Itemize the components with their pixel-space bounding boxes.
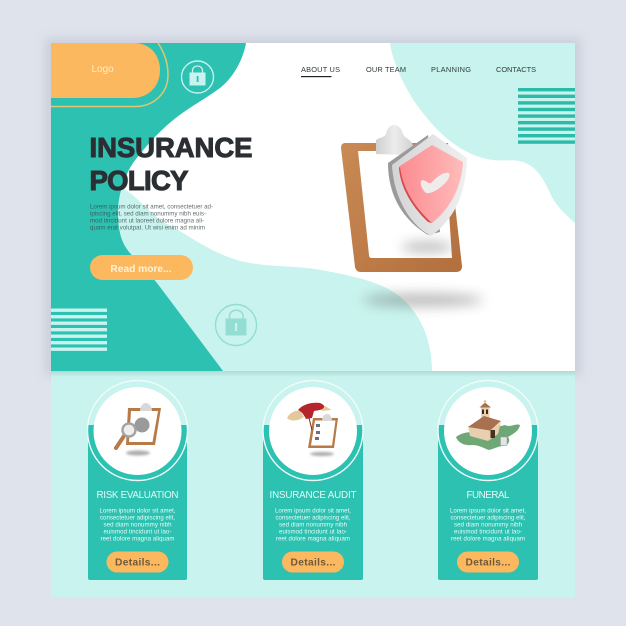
card text: consectetuer adipiscing elit, (450, 514, 526, 522)
card text: Lorem ipsum dolor sit amet, (275, 508, 351, 514)
shield pink (400, 145, 463, 223)
shadow: under clipboard (363, 294, 483, 306)
card text: sed diam nonummy nibh (454, 522, 522, 528)
clipboard clip (376, 125, 413, 155)
card: insurance audit (263, 380, 363, 580)
logo pill (51, 43, 160, 98)
card heading: FUNERAL (466, 490, 510, 501)
card text (450, 508, 526, 542)
button: read more (90, 255, 193, 280)
icon: church (456, 400, 520, 450)
body text: Lorem ipsum dolor sit amet, consectetuer ad- (90, 204, 213, 210)
body text: mod tincidunt ut laoreet dolore magna ali- (90, 218, 204, 224)
card text: euismod tincidunt ut lao- (454, 528, 522, 536)
nav: menu: OUR TEAM (366, 65, 406, 74)
card text: reet dolore magna aliquam (276, 536, 350, 542)
stripes: top right (518, 88, 575, 144)
logo outline (51, 43, 168, 106)
card text (100, 508, 176, 542)
button: details: Details... (290, 558, 336, 568)
stripes: bottom left (51, 308, 107, 351)
card text: Lorem ipsum dolor sit amet, (450, 508, 526, 514)
card text: consectetuer adipiscing elit, (276, 514, 351, 522)
shape: light bottom blob (115, 185, 432, 371)
card heading: INSURANCE AUDIT (270, 490, 357, 501)
body text: ipiscing elit, sed diam nonummy nibh euis- (90, 210, 206, 218)
nav: menu: PLANNING (431, 65, 471, 74)
panel: services (51, 371, 575, 597)
nav: menu: ABOUT US (301, 65, 340, 74)
button: details (457, 552, 519, 572)
shield back (388, 135, 440, 235)
icon: clipboard and umbrella (287, 403, 338, 456)
card text: reet dolore magna aliquam (451, 536, 525, 542)
title (90, 137, 252, 191)
illustration: clipboard with shield (341, 125, 467, 272)
clipboard board (341, 143, 462, 272)
icon: top lock (182, 61, 214, 93)
logo text: Logo (92, 64, 114, 75)
card text: reet dolore magna aliquam (100, 536, 174, 542)
card: funeral (438, 380, 538, 580)
card text: euismod tincidunt ut lao- (279, 528, 347, 536)
button: details (106, 552, 168, 572)
shield silver (392, 134, 467, 236)
card text: consectetuer adipiscing elit, (100, 514, 175, 522)
icon: bottom lock (216, 304, 256, 346)
card text: sed diam nonummy nibh (104, 522, 172, 528)
title: INSURANCE (90, 132, 252, 163)
button: details (282, 552, 344, 572)
shadow: under shield (401, 242, 453, 252)
button: details: Details... (115, 558, 160, 568)
card text: Lorem ipsum dolor sit amet, (100, 508, 176, 514)
body text: quam erat volutpat. Ut wisi enim ad minim (90, 224, 205, 232)
card: risk evaluation (88, 380, 188, 580)
card text: sed diam nonummy nibh (279, 522, 347, 528)
shape: teal left wave (51, 43, 246, 371)
nav: menu (301, 67, 536, 78)
button: read more: Read more... (110, 264, 172, 275)
body text (90, 204, 213, 232)
card text: euismod tincidunt ut lao- (104, 528, 172, 536)
card heading: RISK EVALUATION (96, 490, 178, 501)
button: details: Details... (466, 558, 511, 568)
panel: hero (51, 43, 575, 371)
icon: clipboard and magnifier (116, 403, 161, 456)
nav: menu: CONTACTS (496, 65, 536, 74)
title: POLICY (90, 165, 188, 196)
shape: light top right blob (390, 43, 575, 223)
shield check (421, 173, 450, 193)
card text (275, 508, 351, 542)
